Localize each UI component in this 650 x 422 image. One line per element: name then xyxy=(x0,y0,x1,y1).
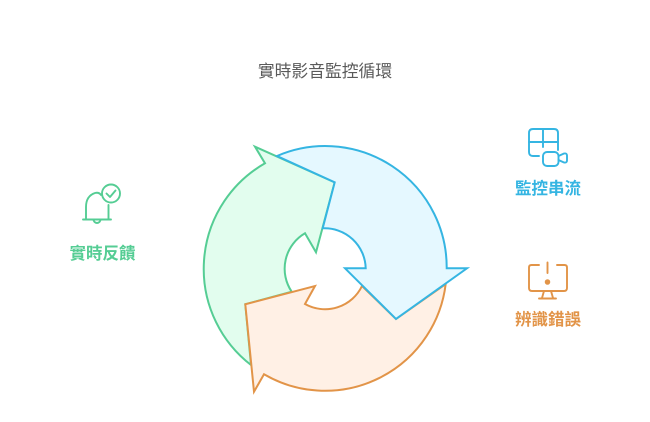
arrow: real-time feedback (green) xyxy=(204,147,335,365)
icon: video grid with camera xyxy=(529,129,567,166)
label: monitoring stream: 監控串流 xyxy=(515,178,582,198)
icon: bell with check xyxy=(83,184,120,223)
cycle diagram xyxy=(204,146,467,392)
arrow: monitoring stream (blue) xyxy=(277,146,467,319)
icon: monitor with alert xyxy=(529,262,567,298)
arrow: identify errors (orange) xyxy=(245,284,446,392)
label: real-time feedback: 實時反饋 xyxy=(70,243,136,263)
label: identify errors: 辨識錯誤 xyxy=(515,309,582,329)
title: 實時影音監控循環 xyxy=(258,62,392,81)
